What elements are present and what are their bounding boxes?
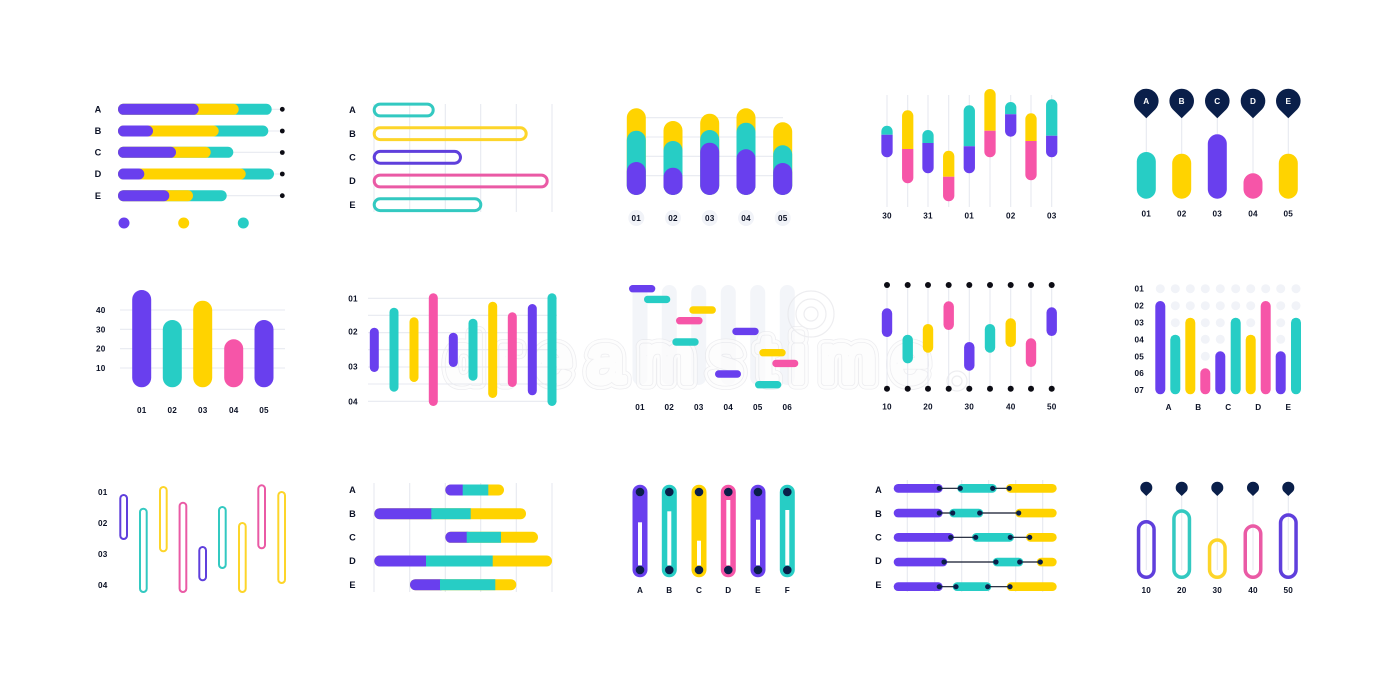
floating column 4: [943, 151, 954, 201]
row C bar: [445, 532, 538, 543]
capsule D: [721, 485, 736, 577]
axis labels: 04: [1248, 209, 1258, 218]
x axis labels: 40: [1006, 403, 1016, 412]
row A bar: [445, 484, 504, 496]
legend dots: [118, 218, 249, 228]
panel: slim outlined columns: [98, 485, 285, 592]
row labels: D: [349, 556, 356, 566]
row labels: D: [349, 176, 356, 186]
column 01: [627, 108, 646, 195]
panel: offset stacked horizontal bars: [349, 483, 552, 592]
y axis labels: 30: [96, 325, 106, 334]
row labels: A: [875, 485, 882, 495]
row B bar: [374, 508, 526, 519]
row labels: C: [875, 532, 882, 542]
connector lines: [226, 109, 282, 196]
column 03: [700, 114, 719, 195]
capsule E: [750, 485, 766, 577]
row B bar: [118, 126, 268, 136]
y axis labels: [348, 294, 358, 406]
row A bar: [118, 104, 272, 115]
x axis labels: 20: [1177, 586, 1187, 595]
pin D: [1241, 89, 1265, 118]
axis labels: 31: [923, 211, 933, 220]
axis labels: [882, 211, 1057, 220]
row labels: C: [95, 148, 102, 158]
columns: [132, 290, 274, 387]
y axis labels: [98, 488, 108, 590]
x axis labels: 50: [1284, 586, 1293, 595]
x axis labels: 40: [1248, 586, 1258, 595]
row labels: [875, 485, 882, 590]
row labels: D: [875, 556, 882, 566]
pin A: [1134, 89, 1159, 118]
x axis labels: D: [1255, 403, 1261, 412]
x axis labels: 02: [168, 406, 177, 415]
watermark: dreamstime: [446, 322, 928, 397]
outlined bars: [374, 104, 547, 211]
x axis labels: 30: [965, 403, 974, 412]
floating column 3: [922, 130, 934, 173]
floating column 7: [1005, 102, 1016, 137]
row labels: C: [349, 532, 356, 542]
pin B: [1169, 89, 1194, 118]
column 05: [773, 122, 792, 195]
watermark: dreamstime: [446, 322, 928, 397]
x axis labels: [882, 403, 1057, 412]
x axis labels: B: [666, 586, 672, 595]
column 04: [736, 108, 756, 195]
y axis labels: 04: [98, 581, 108, 590]
bottom dots: [884, 386, 1055, 392]
row D bar: [374, 556, 552, 566]
panel: columns with lettered map pins: [1134, 89, 1301, 218]
panel: gantt chart: [629, 285, 798, 412]
x axis labels: 20: [923, 403, 933, 412]
axis labels: 02: [668, 214, 678, 223]
panel: columns over dot grid: [1135, 284, 1301, 412]
row labels: E: [95, 191, 101, 201]
x axis labels: 02: [665, 403, 674, 412]
x axis labels: 10: [1142, 586, 1151, 595]
axis labels: 02: [1006, 211, 1016, 220]
panel: gantt background columns: [632, 285, 795, 385]
x axis labels: 04: [229, 406, 239, 415]
y axis labels: [1135, 285, 1144, 395]
row labels: [349, 105, 356, 210]
panel: outlined horizontal bars: [349, 104, 552, 212]
pin E: E: [1285, 97, 1291, 106]
panel: floating two-tone columns: [881, 89, 1057, 220]
watermark: dreamstime: [446, 322, 928, 397]
panel: outlined columns with small pins: [1139, 482, 1296, 595]
row labels: [95, 104, 102, 201]
dot grid: [1156, 284, 1300, 361]
x axis labels: B: [1195, 403, 1201, 412]
floating column 2: [902, 110, 913, 183]
y axis labels: 02: [1135, 302, 1144, 311]
y axis labels: 10: [96, 364, 106, 373]
x axis labels: A: [1166, 403, 1172, 412]
axis labels: 01: [965, 211, 974, 220]
range bars: [882, 301, 1057, 371]
axis labels: 04: [741, 214, 751, 223]
row labels: E: [349, 580, 356, 590]
y axis labels: 01: [348, 294, 358, 303]
row E bar: [410, 579, 516, 590]
row labels: [349, 485, 356, 590]
y axis labels: 40: [96, 306, 106, 315]
x axis labels: 50: [1047, 403, 1057, 412]
panel: slim floating columns: [348, 293, 557, 406]
row A: [894, 484, 1057, 493]
pin D: D: [1250, 97, 1256, 106]
x axis labels: 01: [635, 403, 645, 412]
pin C: C: [1214, 97, 1220, 106]
watermark: dreamstime: [446, 322, 928, 397]
x axis labels: E: [755, 586, 761, 595]
floating column 8: [1025, 113, 1037, 180]
x axis labels: F: [785, 586, 790, 595]
x axis labels: 05: [259, 406, 269, 415]
x axis labels: E: [1285, 403, 1291, 412]
y axis labels: 02: [98, 519, 108, 528]
row E: [894, 582, 1057, 591]
y axis labels: 04: [1135, 335, 1144, 344]
row labels: B: [95, 126, 102, 136]
row D bar: [118, 168, 274, 180]
axis labels: 03: [1213, 209, 1222, 218]
y axis labels: 01: [1135, 285, 1144, 294]
columns: [1137, 134, 1298, 199]
y axis labels: 04: [348, 397, 358, 406]
outlined columns: [120, 485, 285, 592]
axis labels: 30: [882, 211, 892, 220]
x axis labels: 06: [783, 403, 792, 412]
capsule A: [632, 485, 648, 577]
y axis labels: 06: [1135, 369, 1144, 378]
row D: [894, 558, 1057, 566]
x axis labels: [1142, 586, 1293, 595]
x axis labels: D: [725, 586, 731, 595]
row E bar: [118, 190, 227, 201]
y axis labels: 05: [1135, 352, 1144, 361]
axis labels: 05: [1284, 209, 1293, 218]
y axis labels: 03: [98, 550, 108, 559]
row labels: B: [875, 509, 882, 519]
x axis labels: 10: [882, 403, 892, 412]
floating column 5: [964, 105, 975, 173]
x axis labels: [635, 403, 792, 412]
watermark: [446, 291, 967, 397]
row labels: C: [349, 152, 356, 162]
floating column 9: [1046, 99, 1057, 157]
panel: rounded column chart: [96, 290, 285, 415]
row labels: E: [349, 200, 356, 210]
panel: segmented timeline bars: [875, 480, 1057, 592]
axis labels: [628, 210, 791, 226]
floating column 1: [881, 126, 893, 157]
x axis labels: C: [1225, 403, 1231, 412]
axis labels: 03: [1047, 211, 1057, 220]
row C: [894, 533, 1057, 542]
row labels: A: [349, 105, 356, 115]
y axis labels: 03: [1135, 319, 1144, 328]
x axis labels: 30: [1213, 586, 1222, 595]
row labels: B: [349, 129, 356, 139]
capsule B: [662, 485, 677, 577]
x axis labels: [637, 586, 790, 595]
floating column 6: [984, 89, 996, 157]
y axis labels: 07: [1135, 386, 1144, 395]
x axis labels: 03: [198, 406, 208, 415]
gantt bars: [629, 285, 798, 388]
row labels: B: [349, 509, 356, 519]
pin A: A: [1143, 97, 1149, 106]
x axis labels: C: [696, 586, 702, 595]
y axis labels: 03: [348, 362, 358, 371]
row labels: A: [95, 104, 102, 114]
row labels: D: [95, 169, 102, 179]
axis labels: 03: [705, 214, 715, 223]
x axis labels: 03: [694, 403, 704, 412]
axis labels: 01: [1142, 209, 1151, 218]
row labels: A: [349, 485, 356, 495]
axis labels: [1142, 209, 1293, 218]
y axis labels: 02: [348, 328, 358, 337]
pin C: [1205, 89, 1230, 118]
x axis labels: [1166, 403, 1291, 412]
row C bar: [118, 147, 233, 158]
capsule C: [692, 485, 706, 577]
top dots: [884, 282, 1055, 288]
y axis labels: 20: [96, 345, 106, 354]
x axis labels: 01: [137, 406, 147, 415]
axis labels: 02: [1177, 209, 1187, 218]
panel: stacked horizontal bars with end dots: [95, 104, 285, 228]
pin B: B: [1179, 97, 1185, 106]
row B: [894, 509, 1057, 517]
row labels: E: [875, 580, 882, 590]
outlined columns: [1139, 511, 1296, 577]
capsule F: [780, 485, 795, 577]
y axis labels: [96, 306, 106, 373]
columns: [1155, 301, 1301, 394]
pin E: [1276, 89, 1301, 118]
axis labels: 01: [632, 214, 641, 223]
x axis labels: [137, 406, 269, 415]
column 02: [664, 121, 682, 195]
x axis labels: 04: [724, 403, 733, 412]
small pins: [1140, 482, 1294, 496]
panel: stacked overlapping column chart: [627, 108, 792, 226]
end dots: [280, 107, 285, 198]
panel: range columns between dots: [882, 282, 1057, 412]
x axis labels: 05: [753, 403, 763, 412]
axis labels: 05: [778, 214, 788, 223]
y axis labels: 01: [98, 488, 108, 497]
panel: progress capsules: [632, 485, 795, 595]
x axis labels: A: [637, 586, 643, 595]
slim columns: [370, 293, 556, 406]
